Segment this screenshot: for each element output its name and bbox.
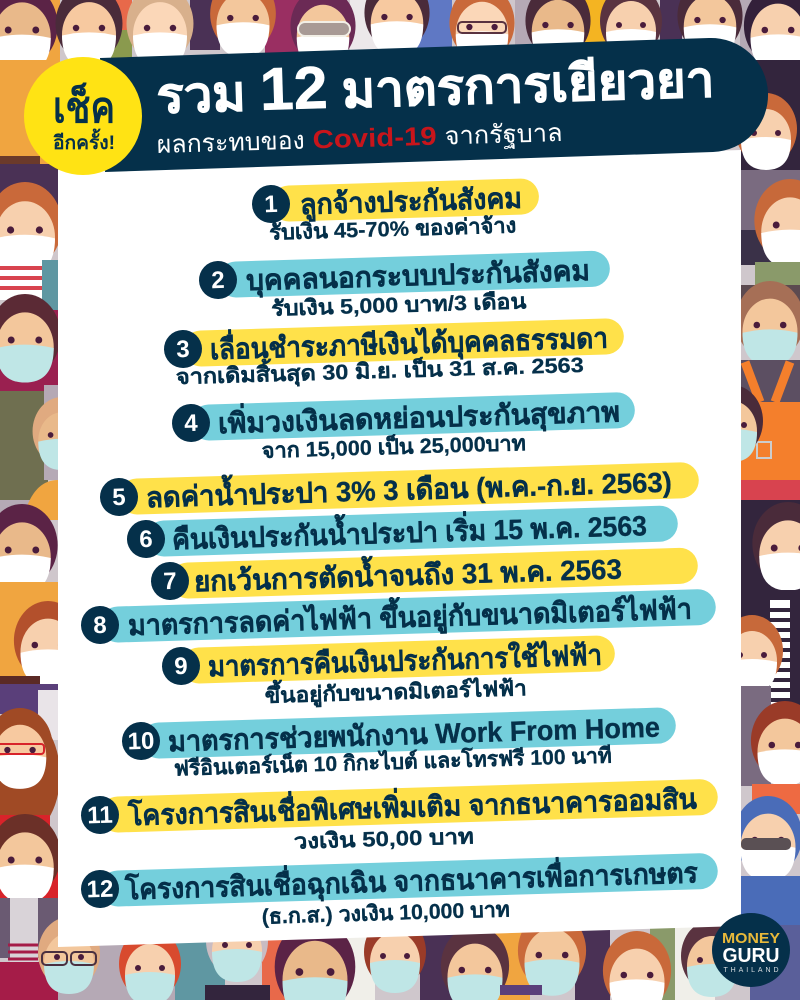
item 7 — [150, 545, 698, 601]
item 10 detail: ฟรีอินเตอร์เน็ต 10 กิกะไบต์ และโทรฟรี 100 นาที — [173, 742, 612, 780]
item 1: 1 — [264, 191, 278, 218]
item 8: มาตรการลดค่าไฟฟ้า ขึ้นอยู่กับขนาดมิเตอร์ไฟฟ้า — [127, 587, 692, 643]
item 11: โครงการสินเชื่อพิเศษเพิ่มเติม จากธนาคารออมสิน — [126, 778, 697, 831]
item 1 detail: รับเงิน 45-70% ของค่าจ้าง — [269, 213, 517, 245]
item 11: 11 — [87, 802, 113, 829]
item 4: 4 — [184, 410, 199, 437]
item 6: 6 — [139, 526, 153, 553]
item 5: ลดค่าน้ำประปา 3% 3 เดือน (พ.ค.-ก.ย. 2563) — [145, 461, 672, 513]
item 1: ลูกจ้างประกันสังคม — [300, 183, 522, 222]
item 12: 12 — [86, 876, 114, 903]
badge text small: อีกครั้ง! — [53, 128, 115, 154]
subtitle — [156, 117, 563, 159]
item 5: 5 — [112, 484, 126, 511]
check again badge — [24, 57, 142, 175]
item 6: คืนเงินประกันน้ำประปา เริ่ม 15 พ.ค. 2563 — [171, 504, 647, 555]
item 9: มาตรการคืนเงินประกันการใช้ไฟฟ้า — [208, 639, 602, 682]
logo: Money Guru Thailand: GURU — [722, 945, 780, 967]
logo: Money Guru Thailand — [712, 913, 790, 987]
title: รวม 12 มาตรการเยียวยา — [155, 42, 715, 126]
item 11 detail: วงเงิน 50,00 บาท — [294, 825, 474, 854]
header banner — [100, 38, 768, 172]
subtitle highlight: Covid-19 — [312, 121, 437, 154]
item 2 detail: รับเงิน 5,000 บาท/3 เดือน — [271, 289, 527, 321]
logo: Money Guru Thailand: MONEY — [722, 930, 780, 947]
badge text large: เช็ค — [53, 82, 115, 131]
crowd: right column — [701, 60, 800, 936]
item 8: 8 — [93, 612, 107, 639]
item 12: โครงการสินเชื่อฉุกเฉิน จากธนาคารเพื่อการเกษตร — [123, 852, 698, 907]
item 10: มาตรการช่วยพนักงาน Work From Home — [168, 712, 660, 757]
item 3: 3 — [176, 336, 190, 363]
item 2: บุคคลนอกระบบประกันสังคม — [246, 255, 590, 298]
item 12 detail: (ธ.ก.ส.) วงเงิน 10,000 บาท — [262, 898, 510, 929]
item 3: เลื่อนชำระภาษีเงินได้บุคคลธรรมดา — [209, 317, 608, 367]
item 7: ยกเว้นการตัดน้ำจนถึง 31 พ.ค. 2563 — [193, 548, 622, 597]
item 3 detail: จากเดิมสิ้นสุด 30 มิ.ย. เป็น 31 ส.ค. 2563 — [175, 349, 584, 391]
item 2: 2 — [211, 267, 225, 294]
item 2 — [198, 249, 610, 300]
crowd: bottom row — [38, 905, 800, 1000]
white content panel — [58, 150, 741, 947]
item 4 detail: จาก 15,000 เป็น 25,000บาท — [261, 429, 526, 463]
subtitle: จากรัฐบาล — [444, 119, 563, 150]
crowd: left column — [0, 60, 91, 1000]
item 7: 7 — [163, 568, 177, 595]
item 4: เพิ่มวงเงินลดหย่อนประกันสุขภาพ — [217, 391, 620, 441]
crowd: top row — [0, 0, 800, 73]
item 9 detail: ขึ้นอยู่กับขนาดมิเตอร์ไฟฟ้า — [264, 672, 527, 710]
item 9: 9 — [174, 653, 188, 680]
logo: Money Guru Thailand: THAILAND — [724, 967, 778, 974]
item 1 — [251, 177, 539, 224]
item 10: 10 — [127, 728, 155, 755]
subtitle: ผลกระทบของ — [156, 127, 305, 159]
